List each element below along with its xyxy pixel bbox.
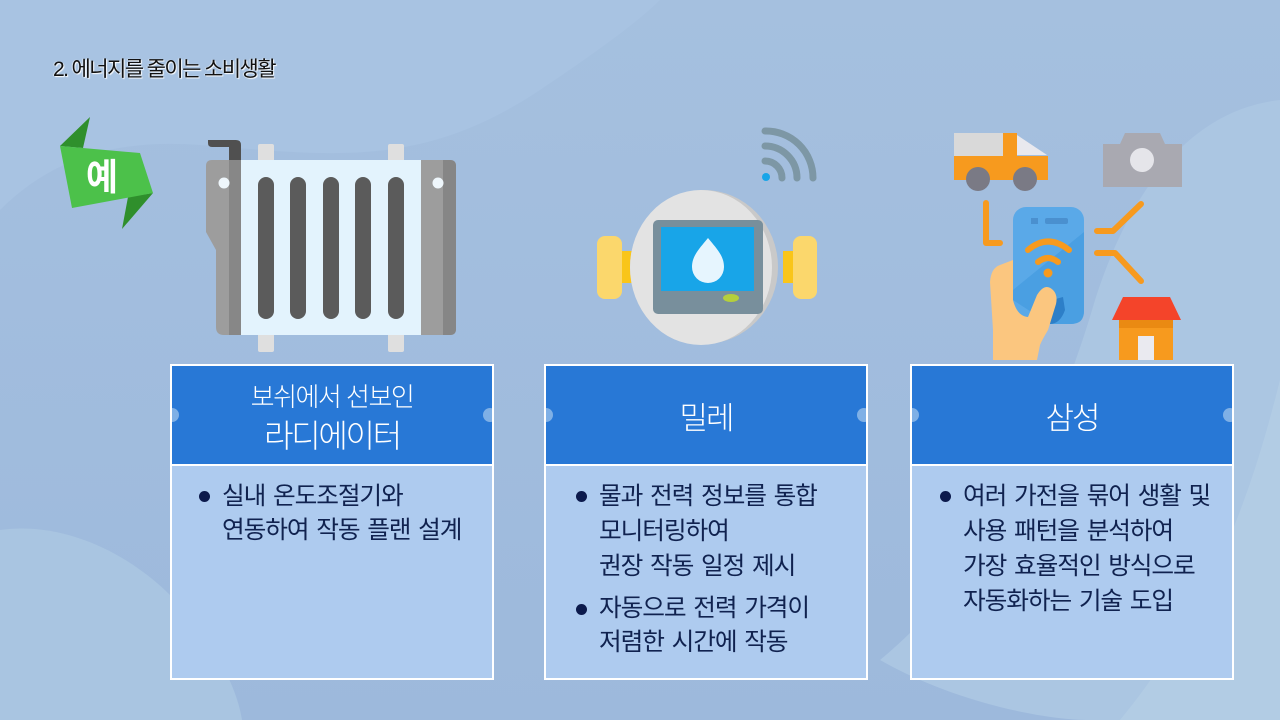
- panel header: Miele: [546, 366, 866, 466]
- panel text: Samsung: 사용 패턴을 분석하여: [963, 518, 1173, 545]
- panel text: Bosch: 연동하여 작동 플랜 설계: [222, 517, 461, 544]
- panel header: Samsung: [912, 366, 1232, 466]
- icon: green example badge: 예: [86, 157, 118, 198]
- panel text: Samsung: [963, 483, 1210, 615]
- panel text: Bosch: 실내 온도조절기와: [222, 483, 403, 510]
- panel: Bosch radiator: [170, 364, 494, 680]
- panel header: Bosch: [172, 366, 492, 466]
- panel header: Bosch: 라디에이터: [264, 418, 400, 454]
- panel header: Bosch: 보쉬에서 선보인: [251, 382, 413, 412]
- panel header: Miele: 밀레: [679, 401, 733, 436]
- bullet: [576, 491, 587, 502]
- bullet: [576, 604, 587, 615]
- title: 2. 에너지를 줄이는 소비생활: [53, 58, 275, 81]
- panel text: Bosch: [222, 483, 461, 544]
- panel: Samsung: [910, 364, 1234, 680]
- panel text: Samsung: 여러 가전을 묶어 생활 및: [963, 483, 1210, 510]
- panel: Miele: [544, 364, 868, 680]
- panel text: Miele 1: [599, 483, 817, 580]
- panel text: Miele 1: 물과 전력 정보를 통합: [599, 483, 817, 510]
- panel text: Samsung: 가장 효율적인 방식으로: [963, 553, 1195, 580]
- panel text: Miele 1: 모니터링하여: [599, 518, 729, 545]
- bullet: [940, 491, 951, 502]
- panel header: Samsung: 삼성: [1045, 401, 1099, 436]
- panel text: Miele 1: 권장 작동 일정 제시: [599, 553, 795, 580]
- panel text: Miele 2: [599, 595, 809, 656]
- panel text: Samsung: 자동화하는 기술 도입: [963, 588, 1173, 615]
- panel text: Miele 2: 저렴한 시간에 작동: [599, 629, 787, 656]
- panel text: Miele 2: 자동으로 전력 가격이: [599, 595, 809, 622]
- bullet: [199, 491, 210, 502]
